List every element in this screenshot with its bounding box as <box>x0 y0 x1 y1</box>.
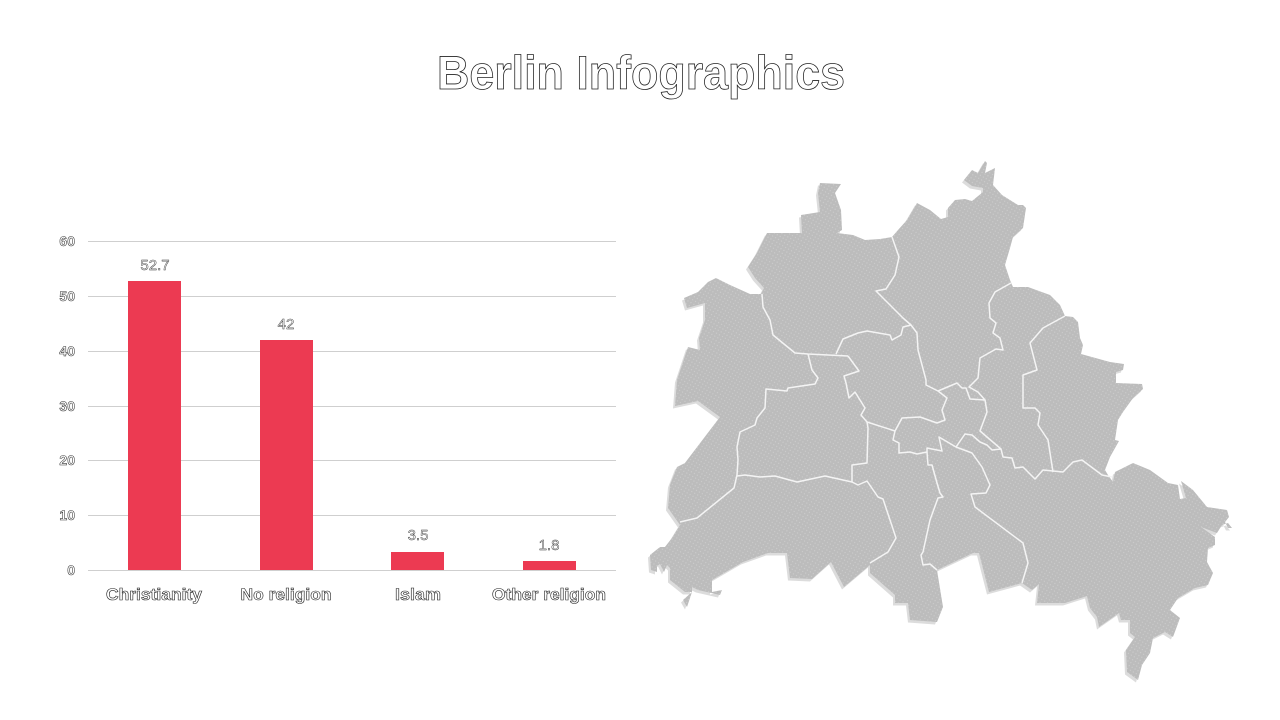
map edge shadow <box>648 164 1230 682</box>
category labels <box>106 585 606 604</box>
category labels: Islam <box>395 585 441 604</box>
y-axis labels <box>59 233 75 578</box>
y-axis labels: 0 <box>67 562 75 578</box>
category labels: No religion <box>240 585 332 604</box>
y-axis labels: 50 <box>59 288 75 304</box>
bar chart: religion in Berlin <box>59 233 616 604</box>
y-axis labels: 10 <box>59 507 75 523</box>
bars <box>128 281 576 570</box>
value labels: 52.7 <box>140 257 170 274</box>
map of Berlin districts <box>648 161 1232 682</box>
y-axis gridlines <box>88 242 616 570</box>
title: Berlin Infographics <box>437 46 845 99</box>
value labels: 3.5 <box>408 527 428 544</box>
category labels: Christianity <box>106 585 203 604</box>
y-axis labels: 30 <box>59 398 75 414</box>
value labels: 1.8 <box>539 537 559 554</box>
value labels <box>140 257 559 554</box>
map landmass <box>650 161 1232 680</box>
category labels: Other religion <box>492 585 606 604</box>
y-axis labels: 60 <box>59 233 75 249</box>
y-axis labels: 40 <box>59 343 75 359</box>
y-axis labels: 20 <box>59 452 75 468</box>
value labels: 42 <box>278 316 294 333</box>
district borders <box>680 237 1112 583</box>
